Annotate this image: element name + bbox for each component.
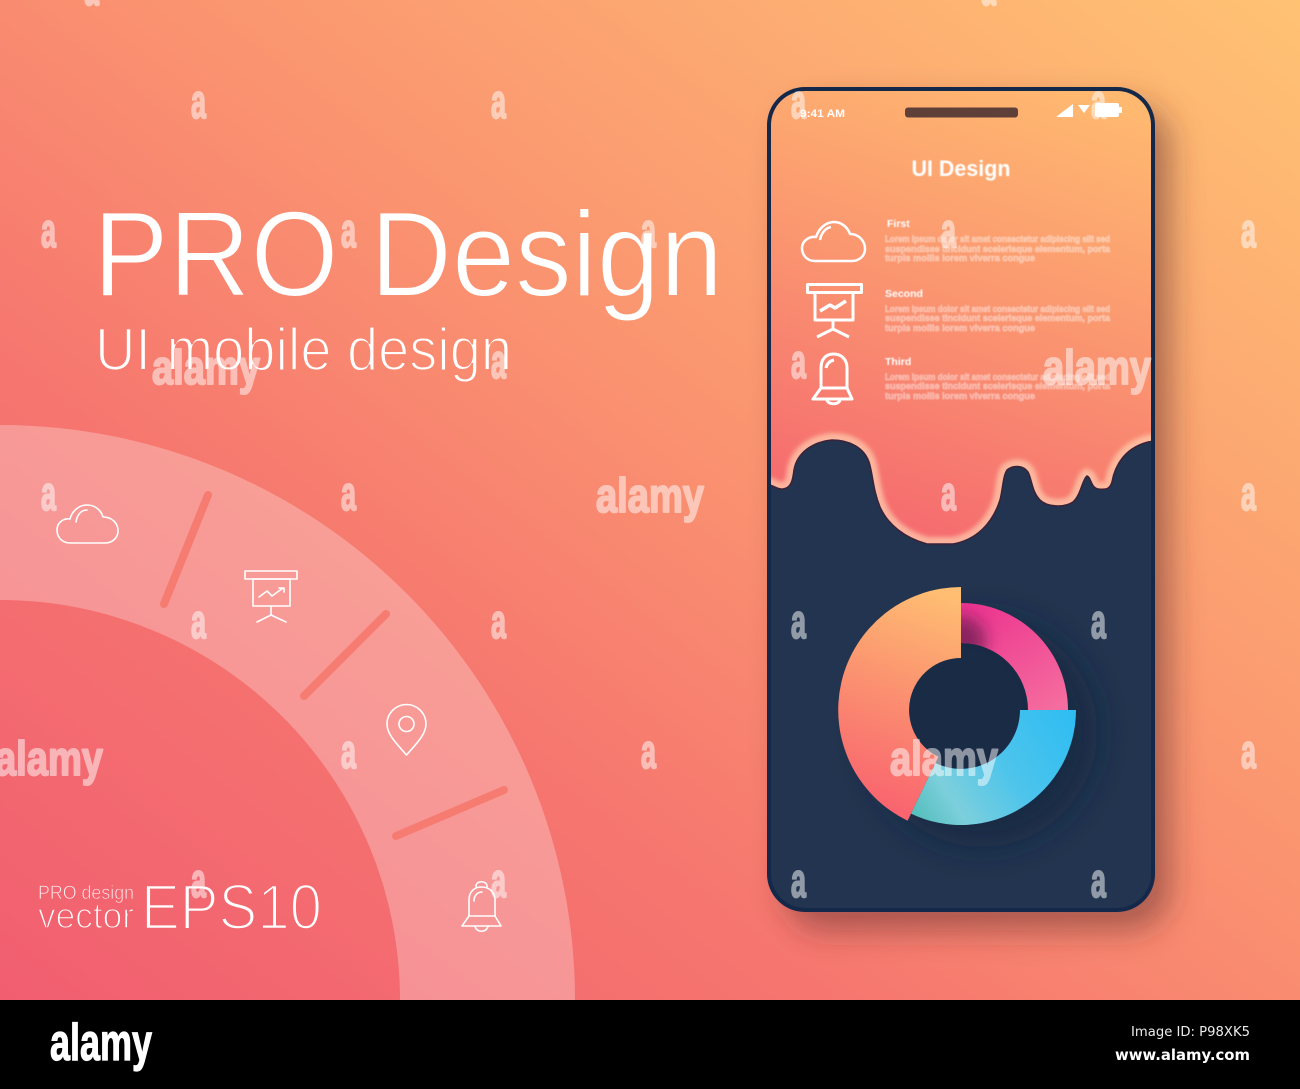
speaker	[905, 108, 1018, 118]
quarter ring panel with icons	[0, 425, 575, 1000]
item body: first: turpis mollis lorem viverra congue	[885, 253, 1035, 264]
item body: first	[885, 234, 1111, 264]
item body: third: suspendisse tincidunt scelerisque elementum, porta	[885, 381, 1111, 392]
watermark words: alamy	[1043, 342, 1151, 395]
item text: second	[885, 288, 1111, 334]
subheading: UI mobile design: UI mobile design	[95, 316, 512, 383]
donut chart	[838, 587, 1097, 847]
screen title: UI Design	[912, 156, 1010, 181]
watermark letters: a	[191, 596, 206, 649]
item body: second: suspendisse tincidunt scelerisque elementum, porta	[885, 313, 1111, 324]
item body: third	[885, 372, 1111, 402]
phone shadow	[785, 105, 1170, 930]
watermark letters: a	[941, 205, 956, 258]
dark lower panel	[760, 440, 1160, 920]
watermark words: alamy	[890, 733, 998, 786]
drip glow edge	[771, 430, 1151, 544]
item body: second: turpis mollis lorem viverra congue	[885, 323, 1035, 334]
item text: third	[885, 356, 1111, 402]
item title: second: Second	[885, 288, 923, 300]
watermark letters	[41, 0, 1256, 908]
icon: cloud small	[802, 222, 865, 261]
segment: blue	[911, 710, 1076, 825]
watermark letters: a	[41, 468, 56, 521]
icon: bell small	[813, 354, 852, 404]
watermark letters: a	[641, 205, 656, 258]
watermark letters: a	[1241, 726, 1256, 779]
phone mockup	[760, 87, 1170, 930]
watermark letters: a	[1241, 205, 1256, 258]
footer bar	[0, 1000, 1300, 1089]
image id: Image ID: P98XK5	[1131, 1024, 1250, 1040]
item title: third: Third	[885, 356, 911, 368]
watermark letters: a	[641, 726, 656, 779]
watermark letters: a	[1091, 596, 1106, 649]
icon: presentation board small	[808, 284, 862, 337]
watermark words: alamy	[152, 342, 260, 395]
donut hole	[899, 648, 1023, 772]
phone screen	[760, 91, 1160, 920]
item body: first: suspendisse tincidunt scelerisque elementum, porta	[885, 244, 1111, 255]
item text: first	[885, 218, 1111, 264]
watermark letters: a	[1091, 855, 1106, 908]
watermark letters: a	[491, 855, 506, 908]
watermark letters: a	[191, 855, 206, 908]
watermark letters: a	[491, 336, 506, 389]
label: PRO design: PRO design	[38, 882, 134, 904]
watermark letters: a	[791, 76, 806, 129]
watermark words: alamy	[596, 470, 704, 523]
watermark letters: a	[191, 76, 206, 129]
watermark letters: a	[941, 468, 956, 521]
item body: second: Lorem ipsum dolor sit amet consectetur adipiscing elit sed	[885, 304, 1110, 315]
icon: location pin	[387, 704, 426, 755]
heading: PRO Design: PRO Design	[93, 186, 723, 322]
watermark letters: a	[791, 596, 806, 649]
watermark letters: a	[491, 596, 506, 649]
status bar time: 9:41 AM	[800, 108, 845, 120]
item body: third: Lorem ipsum dolor sit amet consectetur adipiscing elit sed	[885, 372, 1110, 383]
segment: orange	[838, 587, 961, 821]
watermark letters: a	[341, 205, 356, 258]
icon: presentation board	[245, 571, 297, 622]
label: vector: vector	[38, 895, 134, 936]
watermark letters: a	[1091, 76, 1106, 129]
segment: pink	[961, 603, 1068, 710]
item title: first: First	[887, 218, 910, 230]
watermark letters: a	[1241, 468, 1256, 521]
ring band	[0, 425, 575, 1000]
website: www.alamy.com	[1115, 1046, 1250, 1064]
phone body	[767, 87, 1155, 912]
donut shadow	[898, 618, 1101, 850]
footer background	[0, 1000, 1300, 1089]
item body: first: Lorem ipsum dolor sit amet consectetur adipiscing elit sed	[885, 234, 1110, 245]
watermark letters: a	[341, 468, 356, 521]
watermark letters: a	[491, 76, 506, 129]
status bar indicators	[1056, 103, 1122, 117]
watermark words	[0, 342, 1151, 786]
icon: cloud	[57, 505, 118, 543]
screen upper gradient	[771, 91, 1151, 571]
label: EPS10: EPS10	[141, 871, 322, 943]
footer logo: alamy	[50, 1014, 152, 1072]
item body: second	[885, 304, 1111, 334]
watermark letters: a	[341, 726, 356, 779]
watermark letters: a	[41, 205, 56, 258]
icon: bell	[462, 882, 501, 931]
segment: pink inner shade	[961, 606, 996, 651]
watermark letters: a	[791, 855, 806, 908]
ring dividers	[164, 495, 504, 836]
item body: third: turpis mollis lorem viverra congue	[885, 391, 1035, 402]
watermark letters: a	[791, 336, 806, 389]
